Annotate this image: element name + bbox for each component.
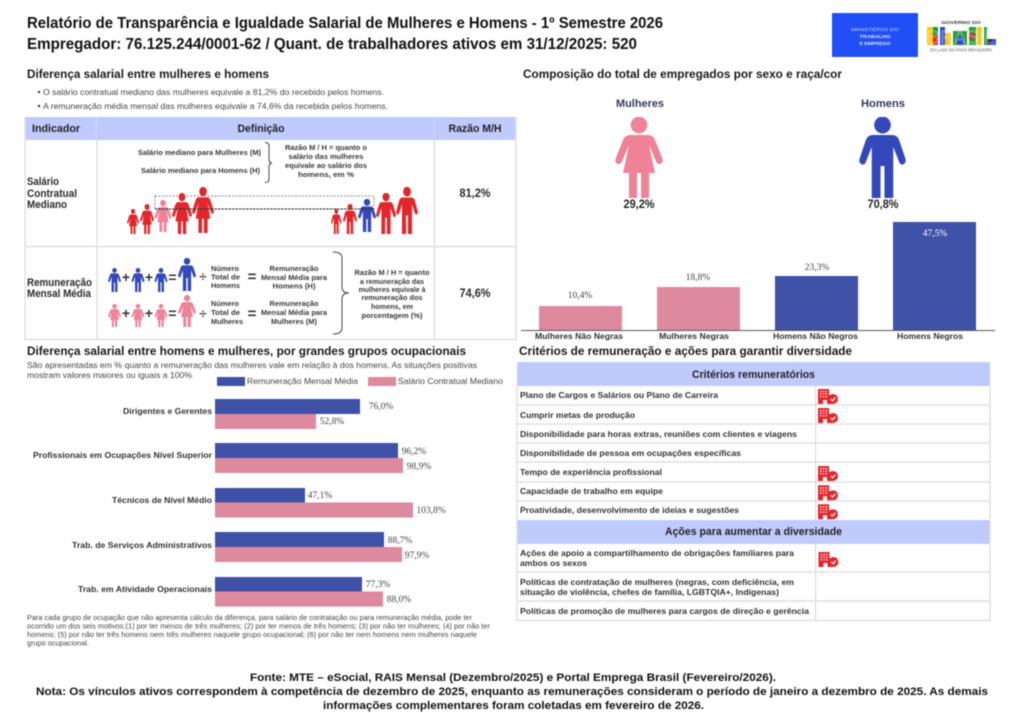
row: remuneração mensal média: a remuneração das [360, 277, 424, 286]
icon panel: mulheres: 29,2% [624, 197, 655, 211]
formula: women [108, 295, 328, 327]
bar chart: composição por raça/cor: 23,3% [805, 263, 829, 273]
group: atividade operacionais [78, 577, 411, 606]
table header: Definição [238, 123, 285, 135]
group: técnicos [112, 488, 446, 518]
criteria rows [520, 390, 797, 515]
formula: men: Total de [211, 272, 241, 282]
bar chart: composição por raça/cor: 47,5% [923, 229, 947, 239]
logo: Ministério do Trabalho e Emprego: TRABALHO [860, 34, 891, 39]
table header: Razão M/H [448, 123, 502, 135]
bar chart: grupos ocupacionais [33, 399, 446, 606]
action rows: ambos os sexos [520, 558, 587, 568]
logo: Governo do Brasil: GOVERNO DO [942, 20, 981, 26]
formula: women: Mensal Média para [261, 308, 328, 317]
title [27, 15, 663, 53]
criteria rows: Cumprir metas de produção [520, 410, 635, 420]
group: técnicos: Técnicos de Nível Médio [112, 495, 212, 505]
formula: women: Remuneração [270, 299, 319, 308]
legend: Remuneração Mensal Média [247, 376, 358, 386]
row: remuneração mensal média: mulheres equivale à [358, 285, 426, 294]
group: profissionais: Profissionais em Ocupações Nível Superior [33, 450, 213, 460]
row: remuneração mensal média: porcentagem (%) [362, 311, 423, 320]
row: salário contratual mediano: Salário mediano para Homens (H) [141, 166, 260, 175]
row: salário contratual mediano: Salário mediano para Mulheres (M) [138, 148, 261, 157]
criteria rows: Capacidade de trabalho em equipe [520, 486, 663, 496]
heading: critérios: Critérios de remuneração e ações para garantir diversidade [519, 344, 852, 358]
heading: composição: Composição do total de empregados por sexo e raça/cor [523, 67, 842, 81]
footer: source and note: Fonte: MTE – eSocial, RAIS Mensal (Dezembro/2025) e Portal Emprega Brasil (Fevereiro/2026). [250, 672, 776, 684]
logo: Governo do Brasil: DO LADO DO POVO BRASILEIRO [930, 48, 993, 52]
group: serviços administrativos [72, 532, 429, 562]
group: profissionais [33, 443, 431, 473]
criteria rows: Disponibilidade para horas extras, reuniões com clientes e viagens [520, 429, 797, 439]
bar chart: composição por raça/cor: Mulheres Não Negras [535, 331, 623, 341]
formula: men: Remuneração [270, 264, 319, 273]
footer: source and note: Nota: Os vínculos ativos correspondem à competência de dezembro de 2025, enquanto as remunerações consideram o período de janeiro a dezembro de 2025. As demais [36, 686, 988, 698]
bar chart: composição por raça/cor: Homens Negros [897, 331, 963, 341]
legend [217, 376, 503, 386]
row: salário contratual mediano: Salário [27, 176, 59, 188]
action rows: Ações de apoio a compartilhamento de obrigações familiares para [520, 548, 794, 558]
action rows: Políticas de contratação de mulheres (negras, com deficiência, em [520, 577, 794, 587]
formula: men: Número [211, 264, 239, 273]
formula: women: Total de [211, 308, 241, 317]
bar chart: composição por raça/cor: 10,4% [568, 291, 592, 301]
formula: men: = [248, 268, 257, 286]
group: técnicos: 103,8% [416, 506, 446, 516]
bar chart: composição por raça/cor: Mulheres Negras [659, 331, 729, 341]
formula: women: + [122, 305, 130, 321]
criteria rows: Disponibilidade de pessoa em ocupações específicas [520, 448, 741, 458]
legend: Salário Contratual Mediano [398, 376, 503, 386]
group: dirigentes: Dirigentes e Gerentes [123, 406, 212, 416]
row: salário contratual mediano: Contratual [27, 188, 77, 200]
action rows: situação de violência, chefes de família, LGBTQIA+, Indígenas) [520, 587, 779, 597]
formula: men: Homens (H) [272, 282, 316, 290]
panel: indicator table [25, 117, 516, 340]
footer: source and note [36, 672, 988, 712]
formula: women: + [145, 305, 153, 321]
action rows [520, 548, 809, 616]
title: Empregador: 76.125.244/0001-62 / Quant. de trabalhadores ativos em 31/12/2025: 520 [27, 36, 637, 53]
section header: critérios remuneratórios: Critérios remuneratórios [692, 369, 815, 381]
text block: methodological note: grupo ocupacional. [27, 638, 89, 648]
criteria rows: Proatividade, desenvolvimento de ideias e sugestões [520, 505, 739, 515]
row: salário contratual mediano [27, 142, 491, 234]
footer: source and note: informações complementares foram coletadas em fevereiro de 2026. [323, 700, 704, 712]
panel: criteria table [517, 362, 990, 620]
heading: diferença salarial: Diferença salarial entre mulheres e homens [27, 67, 269, 81]
table header: Indicador [32, 123, 81, 135]
icons: women by salary [127, 187, 214, 234]
row: salário contratual mediano: salário das mulheres [288, 152, 364, 161]
row: salário contratual mediano: Mediano [27, 199, 67, 211]
group: dirigentes [123, 399, 393, 429]
text block: subtitle: mostram valores maiores ou iguais a 100% [27, 370, 192, 380]
row: remuneração mensal média [27, 252, 491, 334]
group: atividade operacionais: 88,0% [387, 595, 411, 605]
icon panel: mulheres: Mulheres [616, 98, 664, 110]
bar chart: composição por raça/cor [521, 222, 995, 341]
formula: women: = [248, 306, 257, 322]
text block: subtitle: São apresentadas em % quanto a remuneração das mulheres vale em relação à dos homens, As situações positivas [27, 360, 477, 370]
group: atividade operacionais: 77,3% [366, 580, 390, 590]
group: serviços administrativos: Trab. de Serviços Administrativos [72, 540, 212, 550]
formula: women: Mulheres [211, 317, 243, 326]
formula: men: ÷ [199, 269, 207, 284]
bullet text block [38, 87, 388, 111]
row: remuneração mensal média: homens, em [371, 302, 413, 311]
row: remuneração mensal média: remuneração dos [362, 293, 422, 302]
logo: Governo do Brasil: BRASIL [926, 27, 996, 49]
text block: methodological note: ocorrido um dos seis motivos:(1) por ter menos de três mulheres; (2) por ter menos de três homens; (3) por não ter mulheres; (4) por não ter [27, 622, 491, 630]
formula: women: ÷ [199, 306, 207, 321]
icons: criteria checked [818, 389, 838, 519]
icon panel: homens: 70,8% [868, 197, 899, 211]
heading: grupos ocupacionais: Diferença salarial entre homens e mulheres, por grandes grupos ocupacionais [27, 344, 466, 358]
logo: Ministério do Trabalho e Emprego: E EMPREGO [860, 41, 891, 46]
bar chart: composição por raça/cor: 18,8% [686, 273, 710, 283]
formula: women: = [168, 305, 177, 321]
section header: ações: Ações para aumentar a diversidade [665, 526, 842, 538]
row: remuneração mensal média: Mensal Média [27, 288, 91, 300]
bullet text block: A remuneração média mensal das mulheres equivale a 74,6% da recebida pelos homens. [43, 101, 388, 111]
logo: Ministério do Trabalho e Emprego: MINISTÉRIO DO [851, 26, 900, 32]
row: remuneração mensal média: Razão M / H = quanto [354, 268, 430, 277]
group: serviços administrativos: 97,9% [405, 551, 429, 561]
bar chart: composição por raça/cor: Homens Não Negros [773, 331, 858, 341]
icon: action checked [818, 552, 838, 567]
logo: Governo do Brasil [926, 20, 996, 52]
action rows: Políticas de promoção de mulheres para cargos de direção e gerência [520, 606, 809, 616]
row: remuneração mensal média: Remuneração [27, 277, 92, 289]
group: dirigentes: 52,8% [320, 417, 344, 427]
formula: women: Número [211, 299, 239, 308]
row: salário contratual mediano: 81,2% [460, 186, 491, 200]
icon panel: homens: Homens [861, 98, 905, 110]
title: Relatório de Transparência e Igualdade Salarial de Mulheres e Homens - 1º Semestre 2026 [27, 15, 663, 32]
formula: men: + [145, 269, 153, 285]
row: salário contratual mediano: Razão M / H = quanto o [285, 143, 367, 152]
group: profissionais: 96,2% [402, 447, 426, 457]
formula: men: = [168, 269, 177, 285]
formula: men: Homens [211, 281, 240, 290]
row: salário contratual mediano: equivale ao salário dos [285, 161, 367, 170]
text block: methodological note: homens; (5) por não ter três homens nem três mulheres naquele grupo ocupacional; (6) por não ter nem homens nem mulheres naquele [27, 630, 477, 639]
text block: methodological note [27, 613, 491, 648]
row: salário contratual mediano: homens, em % [298, 170, 354, 179]
icons: men by salary [331, 187, 418, 234]
text block: subtitle [27, 360, 477, 380]
icon panel: mulheres [615, 98, 664, 211]
formula: men: + [122, 269, 130, 285]
group: serviços administrativos: 88,7% [388, 536, 412, 546]
group: profissionais: 98,9% [407, 462, 431, 472]
criteria rows: Tempo de experiência profissional [520, 467, 662, 477]
logo: Ministério do Trabalho e Emprego [832, 13, 918, 57]
group: dirigentes: 76,0% [369, 402, 393, 412]
text block: methodological note: Para cada grupo de ocupação que não apresenta cálculo da diferença, para salário de contratação ou para remuneração média, pode ter [27, 613, 473, 622]
group: atividade operacionais: Trab. em Atividade Operacionais [78, 584, 212, 594]
formula: men: Mensal Média para [261, 273, 328, 282]
formula: women: Mulheres (M) [271, 317, 317, 326]
formula: men [108, 258, 328, 292]
row: remuneração mensal média: 74,6% [460, 286, 491, 300]
criteria rows: Plano de Cargos e Salários ou Plano de Carreira [520, 390, 718, 400]
bullet text block: O salário contratual mediano das mulheres equivale a 81,2% do recebido pelos homens. [43, 87, 384, 97]
table header [25, 117, 516, 140]
icon panel: homens [859, 98, 906, 211]
group: técnicos: 47,1% [308, 491, 332, 501]
